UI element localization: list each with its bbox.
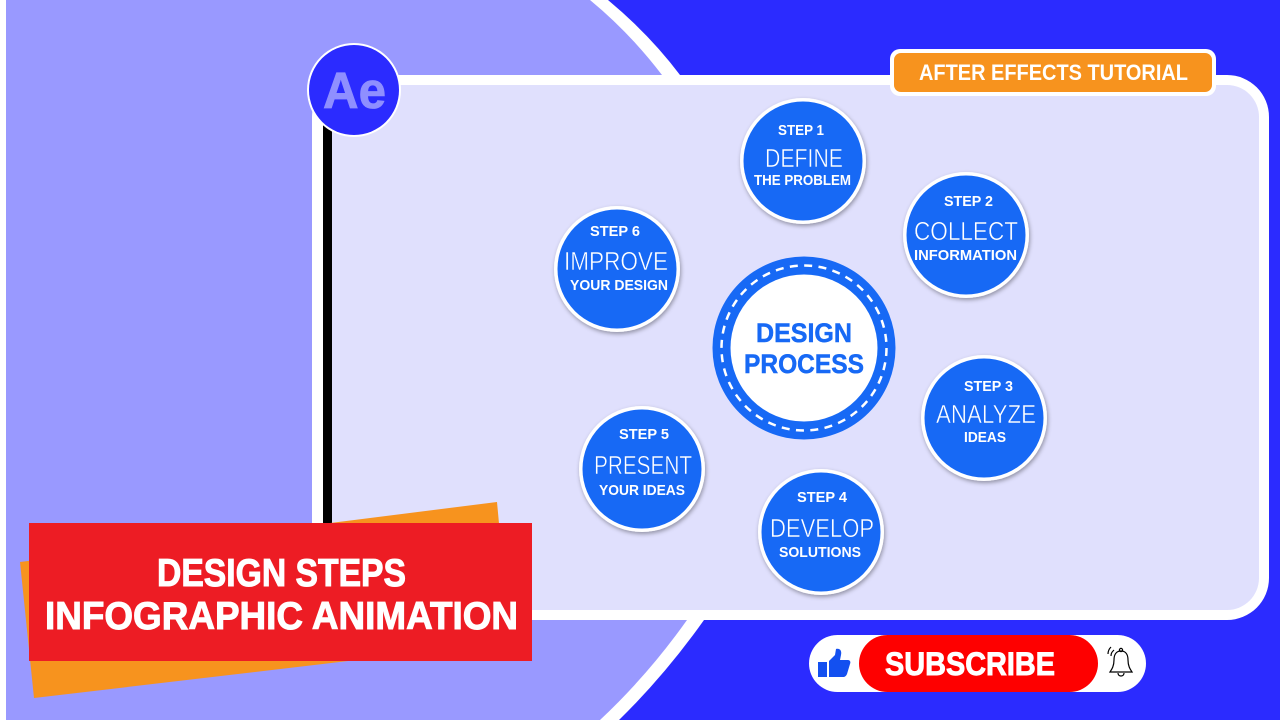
panel: main content card: [312, 75, 1269, 620]
tag: After Effects tutorial: AFTER EFFECTS TUTORIAL: [919, 60, 1188, 85]
step 2: collect information: STEP 2: [944, 193, 993, 210]
center circle: design process: [712, 256, 896, 440]
step 5: present your ideas: PRESENT: [594, 450, 692, 480]
step 2: collect information: COLLECT: [914, 216, 1018, 246]
step 2: collect information: [903, 172, 1029, 298]
icon: notification bell: [1108, 647, 1132, 676]
step 4: develop solutions: [758, 469, 884, 595]
step 1: define the problem: [740, 98, 866, 224]
step 3: analyze ideas: STEP 3: [964, 378, 1013, 395]
step 5: present your ideas: STEP 5: [619, 426, 669, 443]
step 6: improve your design: YOUR DESIGN: [570, 277, 668, 294]
step 4: develop solutions: SOLUTIONS: [779, 544, 861, 561]
title banner: orange backing sheet: [20, 502, 510, 698]
background: lilac left side: [6, 0, 700, 720]
step 6: improve your design: IMPROVE: [564, 246, 668, 276]
center circle: design process: PROCESS: [744, 349, 864, 379]
icon: thumbs up: [818, 649, 850, 677]
title banner: red block with title: INFOGRAPHIC ANIMATION: [45, 595, 518, 638]
center circle: design process: DESIGN: [756, 318, 852, 348]
step 4: develop solutions: DEVELOP: [770, 513, 874, 543]
title banner: red block with title: DESIGN STEPS: [157, 552, 406, 595]
step 1: define the problem: STEP 1: [778, 122, 824, 139]
step 3: analyze ideas: ANALYZE: [936, 399, 1036, 429]
step 3: analyze ideas: [921, 355, 1047, 481]
step 6: improve your design: STEP 6: [590, 223, 640, 240]
step 4: develop solutions: STEP 4: [797, 489, 848, 506]
step 1: define the problem: DEFINE: [765, 143, 843, 173]
subscribe bar: SUBSCRIBE: [885, 646, 1055, 682]
step 2: collect information: INFORMATION: [914, 247, 1017, 264]
step 5: present your ideas: [579, 406, 705, 532]
subscribe bar: [809, 635, 1146, 692]
step 1: define the problem: THE PROBLEM: [754, 172, 851, 189]
background: white curved band: [0, 0, 720, 720]
tag: After Effects tutorial: [890, 49, 1216, 96]
step 6: improve your design: [554, 206, 680, 332]
step 3: analyze ideas: IDEAS: [964, 429, 1006, 446]
icon: After Effects badge: [307, 43, 401, 137]
step 5: present your ideas: YOUR IDEAS: [599, 482, 685, 499]
icon: After Effects badge: Ae: [323, 62, 386, 119]
title banner: red block with title: [29, 523, 532, 661]
